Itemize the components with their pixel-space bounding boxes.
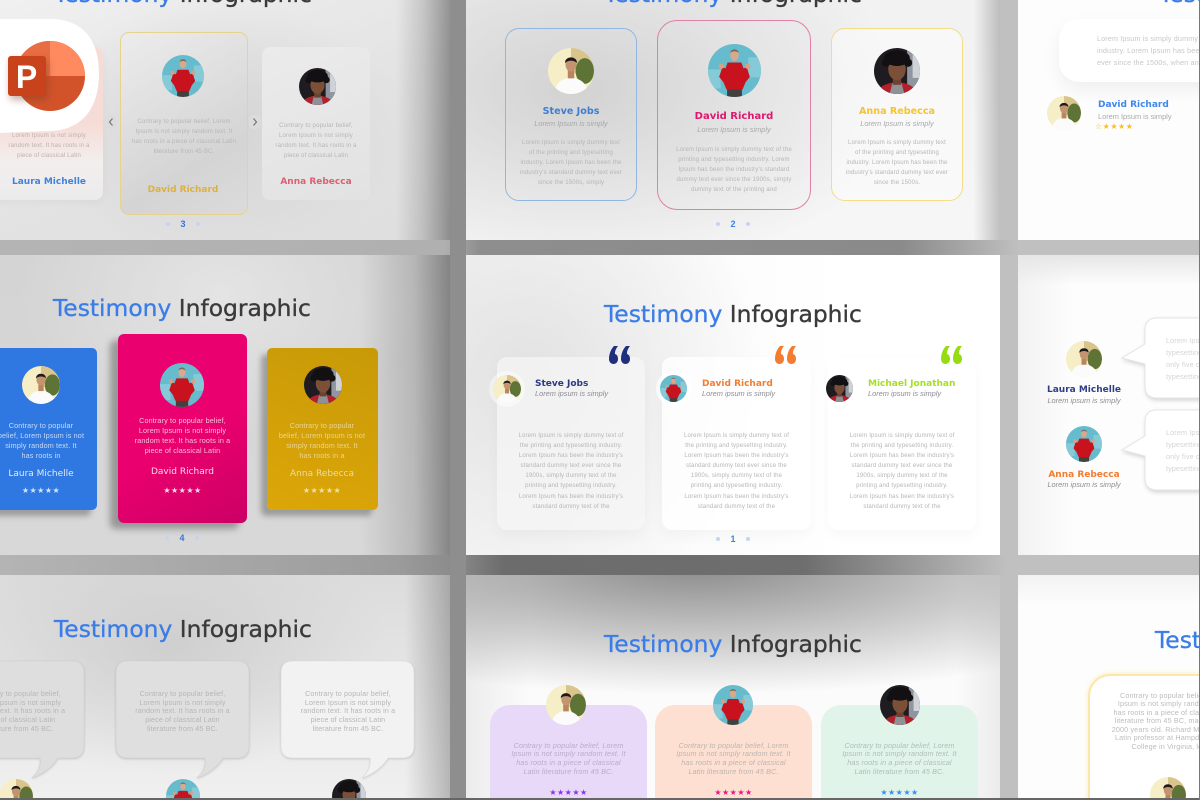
avatar: Steve	[546, 685, 586, 725]
testimonial text: Anna	[275, 122, 357, 159]
pagination: 1: 1	[730, 534, 736, 544]
testimonial text: industry's standard dummy text ever	[520, 170, 622, 176]
testimonial text: Contrary to popular belief, Lorem	[678, 740, 789, 750]
star rating: ★★★★★	[880, 788, 919, 797]
bubble text 2	[1166, 427, 1200, 475]
testimonial text	[135, 416, 230, 455]
testimonial text: Anna: random text. It has roots in a	[275, 143, 357, 149]
card: Steve Jobs	[497, 357, 645, 530]
testimonial text: industry. Lorem Ipsum has been the	[846, 160, 948, 166]
subtitle: Lorem Ipsum is simply	[534, 119, 608, 128]
star rating: ★★★★★	[714, 788, 753, 797]
avatar: David	[660, 375, 687, 402]
avatar: Steve	[548, 48, 594, 94]
bubble text 3: Contrary to popular belief,	[305, 690, 391, 698]
testimonial text	[676, 146, 792, 193]
subtitle: Lorem ipsum is simply	[1047, 480, 1121, 489]
speech bubble 2	[1118, 406, 1200, 496]
card: Laura Michelle	[0, 348, 97, 510]
card: Steve Jobs	[505, 28, 637, 201]
card: David Richard	[120, 32, 248, 215]
testimonial text: simply random text. It	[286, 441, 358, 450]
avatar: David	[162, 55, 204, 97]
card: David Richard	[662, 357, 811, 530]
name: Laura Michelle: Laura Michelle	[8, 469, 74, 479]
testimonial text: the printing and typesetting industry.	[851, 443, 953, 449]
testimonial text: the printing and typesetting industry.	[520, 443, 622, 449]
testimonial text: has roots in a	[299, 451, 345, 460]
testimonial text: standard dummy text ever since the	[686, 463, 787, 469]
testimonial text: Laura	[8, 132, 90, 159]
testimonial text	[1075, 692, 1200, 752]
testimonial text: piece of classical Latin	[145, 446, 220, 455]
testimonial text: Laura: piece of classical Latin	[17, 153, 81, 159]
testimonial text: 1900s, simply dummy text of the	[691, 473, 782, 479]
name: David Richard: David Richard	[1098, 100, 1169, 110]
bubble text 2: random text. It has roots in a	[135, 707, 230, 715]
bubble text 3: random text. It has roots in a	[301, 707, 395, 715]
testimonial text: Laura: random text. It has roots in a	[8, 143, 90, 149]
pagination: 4: 4	[179, 533, 184, 543]
testimonial text: Lorem Ipsum is simply dummy text of	[684, 433, 789, 439]
pagination: 2: 2	[730, 219, 736, 229]
bubble text 1	[1166, 336, 1200, 381]
testimonial text: Ipsum has been the industry's standard	[678, 167, 790, 173]
testimonial text: has roots in a piece of classical	[516, 758, 621, 767]
testimonial text: Lorem Ipsum is simply dummy text of	[849, 433, 955, 439]
testimonial text: Lorem Ipsum is simply dummy	[1097, 34, 1198, 43]
bubble text 2	[116, 690, 249, 734]
bubble card	[1059, 19, 1200, 82]
card: mint	[821, 705, 978, 800]
avatar: Anna	[874, 48, 920, 94]
testimonial text: Contrary to popular	[9, 421, 73, 430]
testimonial text	[655, 742, 812, 776]
card: Michael Jonathan	[828, 357, 976, 530]
slide: speech bubbles with avatars, bottom left	[0, 575, 450, 800]
testimonial text	[518, 432, 624, 510]
testimonial text: Lorem Ipsum is not simply	[139, 426, 226, 435]
speech bubble 3	[277, 657, 419, 782]
testimonial text	[490, 742, 647, 776]
star rating: ★★★★★	[22, 486, 60, 495]
star rating: ★★★★★	[549, 788, 588, 797]
bubble text 2: literature from 45 BC.	[147, 725, 218, 733]
subtitle: Lorem Ipsum is simply	[860, 119, 934, 128]
card: Laura Michelle	[0, 47, 103, 200]
star rating: ★★★★★	[303, 486, 341, 495]
slide: highlighted card, bottom right	[1018, 575, 1200, 800]
star rating: ★★★★★	[163, 486, 202, 495]
bubble text 2: only five c	[1166, 452, 1200, 461]
speech bubble 1	[1121, 318, 1199, 402]
arrow: previous	[108, 118, 113, 126]
testimonial text: Anna: Contrary to popular belief,	[279, 123, 353, 129]
testimonial text: Latin literature from 45 BC.	[854, 767, 945, 776]
avatar: Steve	[493, 375, 521, 403]
subtitle: Lorem ipsum is simply	[702, 389, 775, 398]
card: highlighted	[1088, 674, 1200, 800]
testimonial text	[684, 432, 789, 510]
testimonial text: Contrary to popular belief, Lorem	[844, 740, 955, 750]
avatar: David	[160, 363, 204, 407]
avatar: Steve	[0, 779, 33, 800]
testimonial text: standard dummy text of the	[532, 504, 610, 510]
name: David Richard: David Richard	[151, 467, 214, 477]
avatar: Anna	[304, 366, 342, 404]
bubble text 3	[281, 690, 415, 734]
avatar: David	[166, 779, 200, 800]
bubble text 3: Lorem Ipsum is not simply	[305, 699, 391, 707]
testimonial text: industry. Lorem Ipsum has been the	[520, 160, 622, 166]
testimonial text: belief, Lorem Ipsum is not	[279, 431, 365, 440]
speech bubble 2	[112, 657, 254, 782]
testimonial text: dummy text ever since the 1900s, simply	[676, 177, 792, 183]
testimonial text: has roots in	[22, 451, 60, 460]
card: David Richard	[118, 334, 247, 523]
testimonial text: Lorem Ipsum has been the industry's	[519, 453, 623, 459]
testimonial text	[846, 140, 948, 186]
card: purple	[490, 705, 647, 800]
testimonial text: Ipsum is not simply random text. It	[511, 749, 626, 758]
card: Anna Rebecca	[831, 28, 963, 201]
testimonial text: David: literature from 45 BC.	[154, 149, 214, 155]
testimonial text: standard dummy text of the	[698, 504, 775, 510]
card: David Richard	[657, 20, 811, 210]
subtitle: Lorem ipsum is simply	[535, 389, 608, 398]
name: David Richard: David Richard	[695, 111, 773, 122]
icon: PowerPoint logo badge	[0, 19, 99, 133]
testimonial text: Contrary to popular belief,	[139, 416, 226, 425]
testimonial text: simply random text. It	[5, 441, 77, 450]
testimonial text: printing and typesetting industry.	[856, 483, 948, 489]
bubble text 1: only five c	[1166, 360, 1200, 369]
testimonial text	[1097, 34, 1200, 67]
subtitle: Lorem ipsum is simply	[868, 389, 941, 398]
title: Testimony Infographic	[604, 630, 862, 658]
avatar: Michael	[826, 375, 853, 402]
testimonial text: Ipsum is not simply random text. It	[842, 749, 957, 758]
testimonial text: of the printing and typesetting	[529, 150, 613, 156]
testimonial text: David: has roots in a piece of classical Latin	[132, 139, 236, 145]
name: Anna Rebecca: Anna Rebecca	[859, 106, 935, 117]
icon: navy quote mark	[609, 346, 630, 364]
testimonial text: Anna: piece of classical Latin	[284, 153, 348, 159]
name: Steve Jobs: Steve Jobs	[543, 106, 599, 117]
name: Anna Rebecca: Anna Rebecca	[290, 469, 354, 479]
bubble text 1	[0, 690, 68, 734]
avatar: David	[713, 685, 753, 725]
testimonial text: of the printing and typesetting	[855, 150, 939, 156]
avatar: David	[1047, 96, 1081, 130]
testimonial text: Lorem Ipsum is simply dummy text	[522, 140, 620, 146]
avatar: David	[708, 44, 761, 97]
avatar: Laura	[22, 366, 60, 404]
name: Michael Jonathan: Michael Jonathan	[868, 379, 955, 389]
testimonial text: Lorem Ipsum is simply dummy text of	[518, 433, 624, 439]
card: peach	[655, 705, 812, 800]
testimonial text: Contrary to popular belief, Lorem	[513, 740, 624, 750]
speech bubble 1	[0, 657, 90, 782]
testimonial text: dummy text of the printing and	[691, 187, 777, 193]
testimonial text	[279, 421, 365, 460]
testimonial text: Lorem Ipsum has been the industry's	[850, 494, 954, 500]
testimonial text: the printing and typesetting industry.	[685, 443, 788, 449]
avatar: Anna	[332, 779, 366, 800]
testimonial text: Latin literature from 45 BC.	[688, 767, 779, 776]
testimonial text: Lorem Ipsum has been the industry's	[850, 453, 954, 459]
testimonial text: Lorem Ipsum is simply dummy text of the	[676, 147, 792, 153]
name: Steve Jobs: Steve Jobs	[535, 379, 588, 389]
testimonial text: Lorem Ipsum has been the industry's	[684, 453, 789, 459]
slide: featured quote cards, center	[466, 255, 1000, 555]
testimonial text	[0, 421, 84, 460]
name: Anna Rebecca: Anna Rebecca	[1048, 470, 1120, 480]
testimonial text: David: Ipsum is not simply random text. It	[136, 129, 232, 135]
name: Laura Michelle: Laura Michelle	[12, 177, 86, 187]
title: Testimony Infographic	[54, 615, 312, 643]
title: Testimony Infographic	[53, 294, 311, 322]
name: David Richard: David Richard	[148, 185, 218, 195]
bubble text 2: Lorem Ipsum is not simply	[139, 699, 226, 707]
testimonial text: Latin literature from 45 BC.	[523, 767, 614, 776]
avatar: Anna	[1066, 426, 1102, 462]
testimonial text: printing and typesetting industry.	[691, 483, 782, 489]
testimonial text	[520, 140, 622, 186]
bubble text 3: piece of classical Latin	[311, 716, 385, 724]
testimonial text: printing and typesetting industry.	[525, 483, 617, 489]
arrow: next	[253, 118, 258, 126]
testimonial text: David	[132, 118, 236, 155]
testimonial text: Ipsum is not simply random text. It	[676, 749, 791, 758]
icon: orange quote mark	[775, 346, 796, 364]
testimonial text: standard dummy text ever since the	[852, 463, 952, 469]
testimonial text: industry. Lorem Ipsum has bee	[1097, 46, 1200, 55]
avatar: Steve	[1150, 777, 1186, 800]
testimonial text: has roots in a piece of classical	[681, 758, 786, 767]
testimonial text: Laura: Lorem Ipsum is not simply	[12, 133, 86, 139]
icon: green quote mark	[941, 346, 962, 364]
slide: pastel cards, bottom middle	[466, 575, 1000, 800]
testimonial text: belief, Lorem Ipsum is not	[0, 431, 84, 440]
testimonial text: Anna: Lorem Ipsum is not simply	[279, 133, 353, 139]
testimonial text: 1900s, simply dummy text of the	[525, 473, 617, 479]
testimonial text	[849, 432, 955, 510]
testimonial text: Lorem Ipsum is simply dummy text	[848, 140, 946, 146]
testimonial text: industry's standard dummy text ever	[846, 170, 948, 176]
title: Testimony Infographic	[604, 300, 862, 328]
testimonial text: since the 1500s, simply	[538, 180, 604, 186]
slide: side speech bubbles, middle right	[1018, 255, 1200, 555]
subtitle: Lorem Ipsum is simply	[697, 125, 771, 134]
testimonial text: Lorem Ipsum has been the industry's	[519, 494, 623, 500]
testimonial text: David: Contrary to popular belief, Lorem	[137, 119, 231, 125]
subtitle: Lorem ipsum is simply	[1047, 396, 1121, 405]
avatar: Anna	[880, 685, 920, 725]
card: Anna Rebecca	[267, 348, 378, 510]
name: David Richard: David Richard	[702, 379, 773, 389]
icon: PowerPoint logo badge: P	[16, 59, 37, 95]
testimonial text: since the 1500s.	[874, 180, 920, 186]
subtitle: Lorem Ipsum is simply	[1098, 112, 1172, 121]
testimonial text: standard dummy text ever since the	[521, 463, 621, 469]
bubble text 3: literature from 45 BC.	[313, 725, 383, 733]
card: Anna Rebecca	[262, 47, 370, 200]
star rating: ☆★★★★	[1095, 122, 1133, 131]
testimonial text: random text. It has roots in a	[135, 436, 230, 445]
slide: speech bubble with rating, top right	[1018, 0, 1200, 240]
testimonial text: 1900s, simply dummy text of the	[856, 473, 948, 479]
avatar: Anna	[299, 68, 336, 105]
slide: card carousel, top left	[0, 0, 450, 240]
testimonial text	[821, 742, 978, 776]
avatar: Laura	[1066, 341, 1102, 377]
bubble text 2: Contrary to popular belief,	[140, 690, 225, 698]
slide: colored cards, middle left	[0, 255, 450, 555]
pagination: 3: 3	[180, 219, 186, 229]
slide: outlined profile cards, top middle	[466, 0, 1000, 240]
testimonial text: Lorem Ipsum has been the industry's	[684, 494, 789, 500]
testimonial text: has roots in a piece of classical	[847, 758, 952, 767]
name: Laura Michelle: Laura Michelle	[1047, 385, 1121, 395]
testimonial text: printing and typesetting industry. Lorem	[678, 157, 790, 163]
name: Anna Rebecca: Anna Rebecca	[280, 177, 352, 187]
testimonial text: Contrary to popular	[290, 421, 354, 430]
bubble text 2: piece of classical Latin	[145, 716, 220, 724]
testimonial text: standard dummy text of the	[863, 504, 941, 510]
